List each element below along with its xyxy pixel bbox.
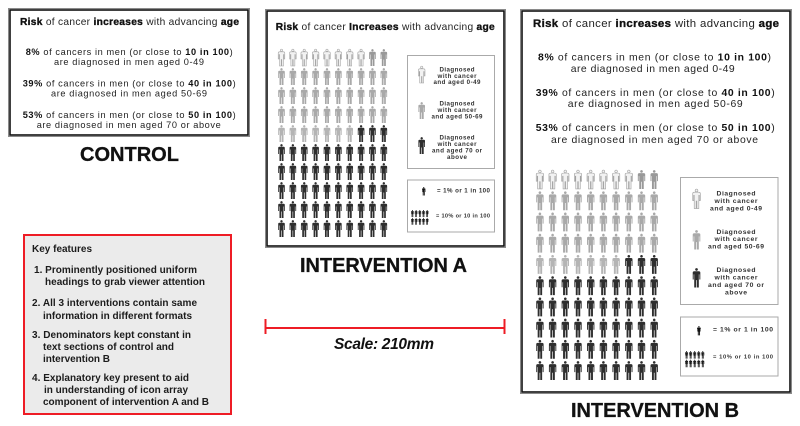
icon: aged 70 or above xyxy=(693,268,700,288)
label: aged 50-69: Diagnosed xyxy=(440,100,475,108)
heading: Risk of cancer increases with advancing age xyxy=(533,18,779,30)
label: aged 50-69 xyxy=(708,229,764,250)
text block: 53%: are diagnosed in men aged 70 or above xyxy=(37,120,221,130)
text block: 53%: 53% of cancers in men (or close to 50 in 100) xyxy=(536,123,775,134)
label: 1 in 100: = 1% or 1 in 100 xyxy=(437,188,491,194)
legend box: scale key xyxy=(680,317,778,376)
label: aged 50-69 xyxy=(432,100,483,120)
label: aged 70 or above: with cancer xyxy=(436,141,477,148)
icon: ten people xyxy=(411,210,429,225)
feature 4: in understanding of icon array xyxy=(44,385,188,396)
text block: 8%: 8% of cancers in men (or close to 10 in 100) xyxy=(26,47,233,57)
legend box: scale key xyxy=(408,180,494,232)
icon array xyxy=(278,49,387,237)
text block: 8% xyxy=(538,52,771,75)
text block: 39%: 39% of cancers in men (or close to 40 in 100) xyxy=(536,88,775,99)
label: aged 50-69: and aged 50-69 xyxy=(708,244,764,250)
scale bar xyxy=(265,319,505,334)
label: intervention A: INTERVENTION A xyxy=(300,255,467,277)
text block: 53% xyxy=(536,123,775,146)
label: aged 70 or above xyxy=(708,267,764,296)
label: aged 70 or above: Diagnosed xyxy=(716,267,756,274)
feature 4: 4. Explanatory key present to aid xyxy=(32,373,189,384)
label: aged 0-49: and aged 0-49 xyxy=(710,205,762,212)
feature 3 xyxy=(32,330,191,365)
icon: aged 70 or above xyxy=(418,137,425,154)
panel: control xyxy=(8,8,250,136)
text block: 39%: are diagnosed in men aged 50-69 xyxy=(568,99,743,110)
text block: 39% xyxy=(536,88,775,110)
icon: ten people xyxy=(685,351,704,367)
key features box xyxy=(24,235,231,414)
feature 3: text sections of control and xyxy=(43,342,174,353)
icon: aged 50-69 xyxy=(418,102,425,119)
label: aged 0-49: Diagnosed xyxy=(716,190,756,198)
intervention B frame xyxy=(520,10,792,394)
text block: 39%: 39% of cancers in men (or close to 40 in 100) xyxy=(23,78,236,88)
icon array xyxy=(536,170,658,380)
label: aged 50-69: Diagnosed xyxy=(716,229,756,236)
label: aged 70 or above: above xyxy=(725,289,747,296)
label: aged 70 or above: and aged 70 or xyxy=(432,148,483,154)
text block: 53%: 53% of cancers in men (or close to 50 in 100) xyxy=(23,110,236,120)
panel: key features xyxy=(24,235,231,414)
label: control: CONTROL xyxy=(80,144,179,166)
feature 2: information in different formats xyxy=(43,311,192,322)
feature 4 xyxy=(32,373,209,408)
label: aged 0-49: with cancer xyxy=(436,73,477,80)
panel: intervention A xyxy=(266,10,506,248)
heading: Risk of cancer increases with advancing age xyxy=(20,17,239,28)
label: aged 70 or above: and aged 70 or xyxy=(708,282,764,289)
label: aged 50-69: with cancer xyxy=(714,236,758,243)
label: aged 70 or above: Diagnosed xyxy=(440,134,475,142)
feature 4: component of intervention A and B xyxy=(43,397,209,408)
key features heading: Key features xyxy=(32,244,92,255)
text block: 53% xyxy=(23,110,236,130)
label: aged 50-69: with cancer xyxy=(436,107,477,114)
feature 3: intervention B xyxy=(43,354,110,365)
label: aged 70 or above: with cancer xyxy=(714,274,758,282)
text block: 39%: are diagnosed in men aged 50-69 xyxy=(51,89,207,99)
icon: aged 0-49 xyxy=(693,189,700,209)
feature 2: 2. All 3 interventions contain same xyxy=(32,298,197,309)
text block: 8%: 8% of cancers in men (or close to 10 in 100) xyxy=(538,52,771,64)
text block: 39% xyxy=(23,78,236,99)
panel: intervention B xyxy=(520,10,792,394)
feature 1: headings to grab viewer attention xyxy=(45,277,205,288)
label: aged 0-49: Diagnosed xyxy=(440,66,475,74)
icon: one person xyxy=(422,187,425,196)
text block: 8%: are diagnosed in men aged 0-49 xyxy=(54,57,204,67)
label: 10 in 100: = 10% or 10 in 100 xyxy=(436,214,490,220)
label: aged 70 or above: above xyxy=(447,154,468,161)
control frame xyxy=(8,8,250,136)
scale label: Scale: 210mm xyxy=(334,336,434,353)
label: aged 0-49 xyxy=(434,66,481,86)
legend box: age groups xyxy=(680,178,778,304)
heading: Risk of cancer Increases with advancing age xyxy=(276,22,495,33)
text block: 8% xyxy=(26,47,233,67)
label: aged 0-49: with cancer xyxy=(714,198,758,205)
text block: 8%: are diagnosed in men aged 0-49 xyxy=(571,64,735,75)
label: aged 70 or above xyxy=(432,134,483,161)
feature 1 xyxy=(34,265,205,288)
label: aged 50-69: and aged 50-69 xyxy=(432,114,483,120)
intervention A frame xyxy=(266,10,506,248)
feature 2 xyxy=(32,298,197,322)
feature 3: 3. Denominators kept constant in xyxy=(32,330,191,341)
label: aged 0-49: and aged 0-49 xyxy=(434,79,481,86)
icon: aged 0-49 xyxy=(418,66,425,83)
label: intervention B: INTERVENTION B xyxy=(571,400,739,422)
feature 1: 1. Prominently positioned uniform xyxy=(34,265,197,276)
legend box: age groups xyxy=(408,56,494,168)
label: 10 in 100: = 10% or 10 in 100 xyxy=(713,354,773,360)
icon: one person xyxy=(697,326,701,335)
icon: aged 50-69 xyxy=(693,230,700,250)
label: 1 in 100: = 1% or 1 in 100 xyxy=(713,326,773,334)
text block: 53%: are diagnosed in men aged 70 or above xyxy=(551,135,758,146)
label: aged 0-49 xyxy=(710,190,762,212)
